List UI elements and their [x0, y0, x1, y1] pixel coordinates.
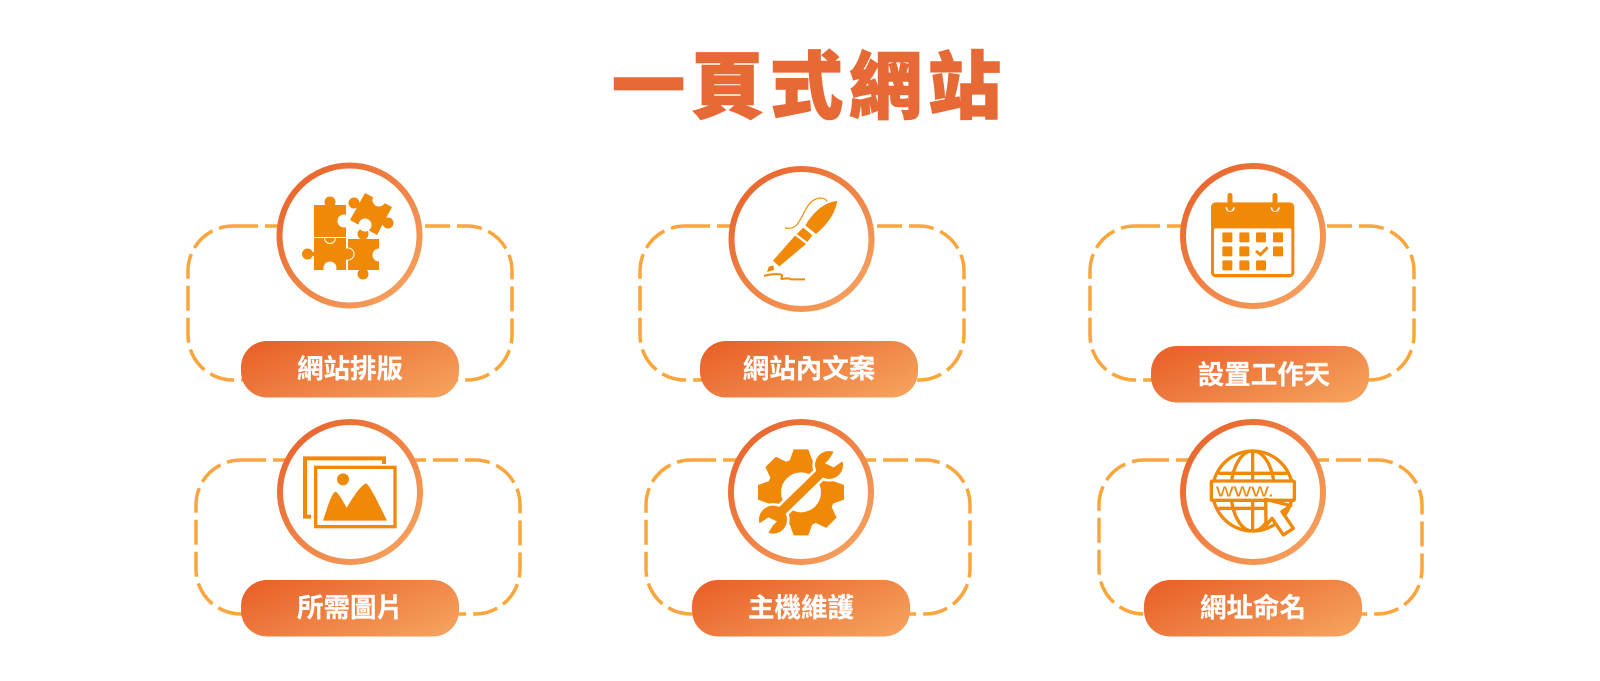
panel: 主機維護 [646, 422, 970, 636]
title: 一頁式網站 [612, 47, 1007, 128]
label pill: 網站內文案 [743, 354, 875, 384]
icon: globe with www bar and cursor: www. [1215, 480, 1274, 501]
panel: 設置工作天 [1090, 166, 1414, 402]
icon: calendar [1211, 195, 1294, 277]
icon: fountain pen [764, 198, 837, 279]
label pill: 網站排版 [297, 354, 403, 384]
label pill [241, 341, 459, 398]
label pill [1151, 346, 1369, 402]
label pill [1144, 580, 1362, 636]
icon: puzzle pieces [302, 193, 394, 280]
panel: 網址命名 [1099, 422, 1422, 636]
label pill [241, 580, 459, 636]
panel: 網站內文案 [640, 169, 964, 398]
label pill [700, 341, 918, 398]
label pill: 主機維護 [748, 593, 854, 623]
panel: 網站排版 [188, 166, 512, 398]
icon: globe with www bar and cursor [1211, 451, 1294, 535]
icon: gear and wrench [756, 448, 846, 536]
label pill: 網址命名 [1200, 593, 1306, 623]
label pill: 所需圖片 [297, 593, 403, 623]
panel: 所需圖片 [196, 422, 520, 636]
label pill: 設置工作天 [1198, 360, 1330, 390]
icon: pictures [305, 458, 395, 527]
label pill [692, 580, 910, 636]
